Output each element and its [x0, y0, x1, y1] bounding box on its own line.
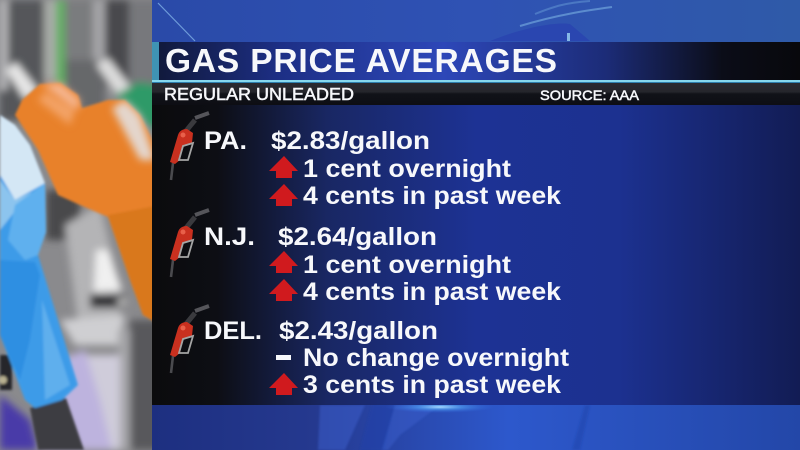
weekly change: 3 cents in past week [303, 371, 561, 399]
icon: gas pump nozzle [170, 210, 209, 277]
source: SOURCE: AAA [540, 87, 640, 103]
price: $2.83/gallon [271, 127, 430, 155]
icon: no change dash [276, 355, 291, 360]
state: N.J.: N.J. [204, 223, 255, 251]
orange nozzle [15, 83, 160, 325]
blue nozzle [0, 115, 84, 450]
icon: up arrow [269, 184, 298, 206]
photo: fuel pump nozzles [0, 0, 160, 450]
overnight change: No change overnight [303, 344, 570, 372]
icon: up arrow [269, 373, 298, 395]
icon: gas pump nozzle [170, 306, 209, 373]
title band [152, 42, 800, 83]
section: Pennsylvania [170, 113, 561, 210]
subtitle band [152, 83, 800, 105]
price: $2.64/gallon [278, 223, 437, 251]
section: New Jersey [170, 210, 561, 306]
icon: up arrow [269, 156, 298, 178]
icon: up arrow [269, 251, 298, 273]
icon: up arrow [269, 279, 298, 301]
section: Delaware [170, 306, 570, 399]
title: GAS PRICE AVERAGES [165, 43, 557, 80]
overnight change: 1 cent overnight [303, 155, 512, 183]
panel: main content background [152, 105, 800, 405]
state: PA.: PA. [204, 127, 247, 155]
state: DEL.: DEL. [204, 317, 262, 345]
weekly change: 4 cents in past week [303, 278, 561, 306]
subtitle: regular unleaded: REGULAR UNLEADED [164, 84, 354, 104]
orange nozzle highlights [38, 83, 155, 160]
overnight change: 1 cent overnight [303, 251, 512, 279]
price: $2.43/gallon [279, 317, 438, 345]
icon: gas pump nozzle [170, 113, 209, 180]
weekly change: 4 cents in past week [303, 182, 561, 210]
